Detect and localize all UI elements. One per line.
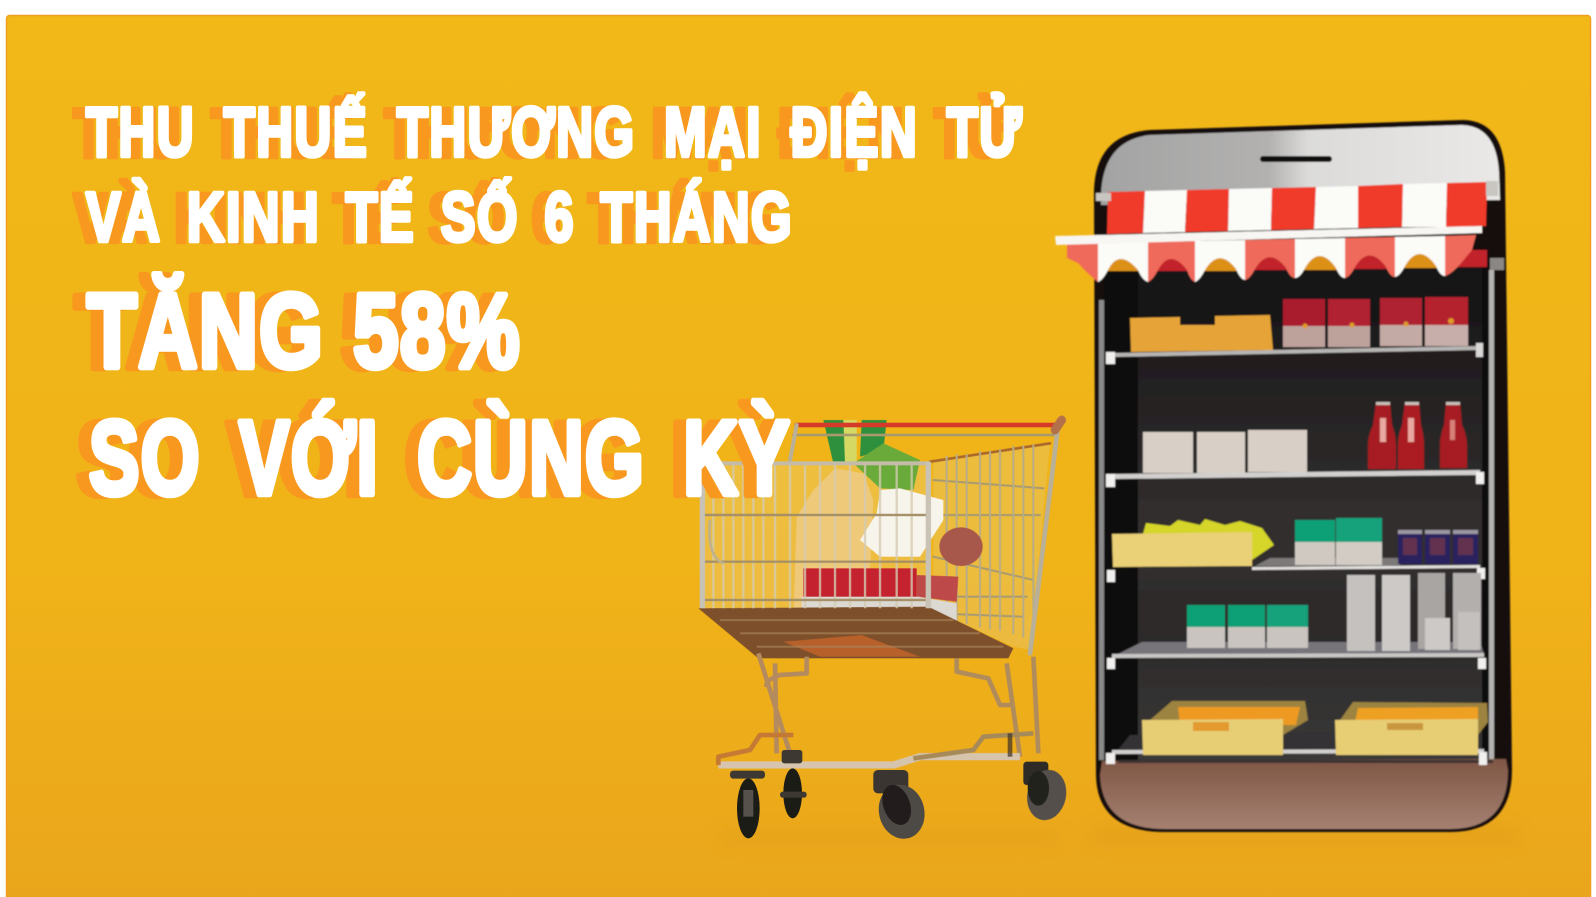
white cartons [1347,573,1481,651]
cart handle and back edge [790,420,1062,653]
title line 2: VÀ KINH TẾ SỐ 6 THÁNG [86,177,793,256]
title line 1: THU THUẾ THƯƠNG MẠI ĐIỆN TỬ [86,92,1023,171]
awning scallop backs [1098,250,1487,271]
illustration: smartphone shop [1055,120,1512,832]
cart chassis [718,653,1038,765]
awning valance [1067,235,1476,282]
phone glass top [1101,125,1500,205]
phone speaker [1260,156,1332,162]
phone body [1094,120,1512,832]
title [86,92,1023,517]
awning brackets [1096,181,1504,270]
left orange crate [1142,701,1308,755]
floor shadows [720,828,1520,842]
ketchup bottles [1368,402,1467,469]
phone bottom panel [1100,759,1508,829]
cart front wires [702,462,930,608]
shop interior [1099,262,1494,762]
awning bar [1055,226,1482,245]
shelf 1 [1106,297,1483,364]
green cans [1295,518,1382,565]
box [1130,315,1273,352]
cart meat [939,527,983,566]
cart greens [823,420,920,490]
shelf 5 [1106,701,1493,765]
headline: increase 58%: TĂNG 58% [87,273,521,390]
right orange crate [1335,702,1488,755]
soup cans [1283,297,1468,347]
cart red cans [802,568,958,627]
shelf 3 [1107,518,1485,582]
paper rolls [1143,430,1307,473]
shelf 2 [1106,402,1484,487]
shelf 4 [1107,573,1486,669]
cart wheels [730,750,1071,844]
yellow fruits [1143,519,1274,560]
illustration: shopping cart [698,420,1071,844]
cart far side [793,435,1057,640]
cart milk jug [793,468,873,618]
cart panel tint [703,443,1050,650]
green tins [1187,605,1308,648]
headline: year on year: SO VỚI CÙNG KỲ [89,400,791,517]
cart white bag [860,488,943,557]
yellow crate [1112,532,1252,567]
awning back stripes [1107,182,1487,234]
jars [1398,530,1478,564]
cart basket bottom [698,607,1013,658]
